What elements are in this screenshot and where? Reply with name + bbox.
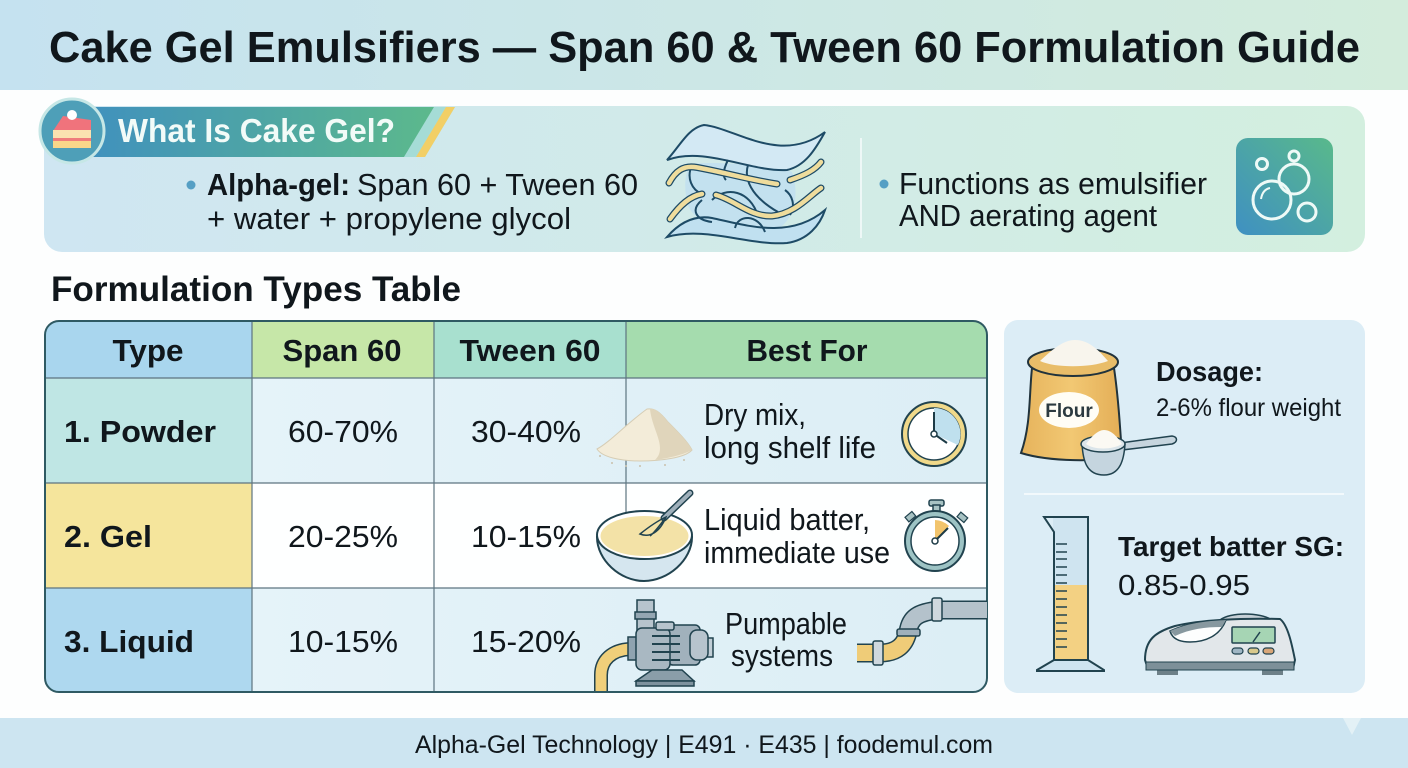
row 2: gel: 20-25% bbox=[288, 519, 398, 554]
row 1: powder: Dry mix, bbox=[704, 397, 806, 432]
footer bar: Alpha-Gel Technology | E491 · E435 | foodemul.com bbox=[415, 731, 993, 759]
icon: cake slice bbox=[40, 99, 104, 163]
panel: what is cake gel bbox=[40, 99, 1365, 252]
row 2: gel: Liquid batter, bbox=[704, 502, 870, 537]
icon: measuring scoop bbox=[1081, 430, 1176, 475]
grid lines bbox=[45, 321, 987, 692]
header labels bbox=[112, 333, 868, 368]
row 2: gel: immediate use bbox=[704, 535, 890, 570]
row 3: liquid: Pumpable bbox=[725, 606, 847, 641]
row 3: liquid: 15-20% bbox=[471, 624, 581, 659]
header labels: Type bbox=[112, 333, 184, 368]
target text bbox=[1118, 531, 1344, 602]
target text: Target batter SG: bbox=[1118, 531, 1344, 562]
icon: mixing bowl with whisk bbox=[597, 493, 692, 581]
footer bar bbox=[0, 718, 1408, 768]
table header cells bbox=[45, 321, 252, 378]
icon: bubbles bbox=[1236, 138, 1333, 235]
heading: formulation types table: Formulation Types Table bbox=[51, 270, 461, 309]
row 2: gel: 2. Gel bbox=[64, 519, 152, 554]
divider bbox=[860, 138, 862, 238]
bullet: functions: Functions as emulsifier bbox=[899, 166, 1207, 201]
formulation table bbox=[45, 321, 987, 692]
bullet: alpha-gel bbox=[186, 167, 638, 236]
header labels: Tween 60 bbox=[460, 333, 600, 368]
row 2: gel bbox=[64, 502, 890, 570]
icon: stopwatch bbox=[905, 500, 968, 571]
bullet: alpha-gel: + water + propylene glycol bbox=[207, 201, 571, 236]
bullet: functions bbox=[880, 166, 1207, 233]
section banner bbox=[70, 107, 455, 157]
row backgrounds bbox=[45, 378, 252, 483]
bullet: alpha-gel: Span 60 + Tween 60 bbox=[357, 167, 638, 202]
icon: alpha-gel lamellar structure bbox=[667, 125, 825, 243]
row 3: liquid: 3. Liquid bbox=[64, 624, 194, 659]
dosage text: 2-6% flour weight bbox=[1156, 394, 1341, 422]
dosage text: Dosage: bbox=[1156, 356, 1263, 387]
row 3: liquid bbox=[64, 606, 847, 673]
row 1: powder: 30-40% bbox=[471, 414, 581, 449]
title banner: Cake Gel Emulsifiers — Span 60 & Tween 60 Formulation Guide bbox=[49, 23, 1360, 72]
icon: flour sack: Flour bbox=[1045, 401, 1093, 422]
row 1: powder bbox=[64, 397, 876, 465]
icon: clock bbox=[902, 402, 966, 466]
row 2: gel: 10-15% bbox=[471, 519, 581, 554]
divider bbox=[1024, 493, 1344, 495]
icon: density meter bbox=[1145, 614, 1295, 675]
panel: dosage and target bbox=[1004, 320, 1365, 693]
section banner: What Is Cake Gel? bbox=[118, 112, 395, 149]
row 1: powder: long shelf life bbox=[704, 430, 876, 465]
bullet: alpha-gel: Alpha-gel: bbox=[207, 167, 350, 202]
title banner bbox=[0, 0, 1408, 90]
dosage text bbox=[1156, 356, 1341, 422]
icon: flour sack bbox=[1021, 340, 1122, 460]
row 1: powder: 1. Powder bbox=[64, 414, 216, 449]
icon: powder pile bbox=[597, 409, 692, 467]
row 3: liquid: systems bbox=[731, 638, 833, 673]
row 3: liquid: 10-15% bbox=[288, 624, 398, 659]
icon: pipe bbox=[857, 598, 987, 665]
icon: graduated cylinder bbox=[1037, 517, 1104, 671]
header labels: Span 60 bbox=[282, 333, 402, 368]
icon: pump bbox=[601, 600, 713, 691]
target text: 0.85-0.95 bbox=[1118, 570, 1250, 602]
bullet: functions: AND aerating agent bbox=[899, 198, 1157, 233]
row 1: powder: 60-70% bbox=[288, 414, 398, 449]
header labels: Best For bbox=[746, 333, 868, 368]
